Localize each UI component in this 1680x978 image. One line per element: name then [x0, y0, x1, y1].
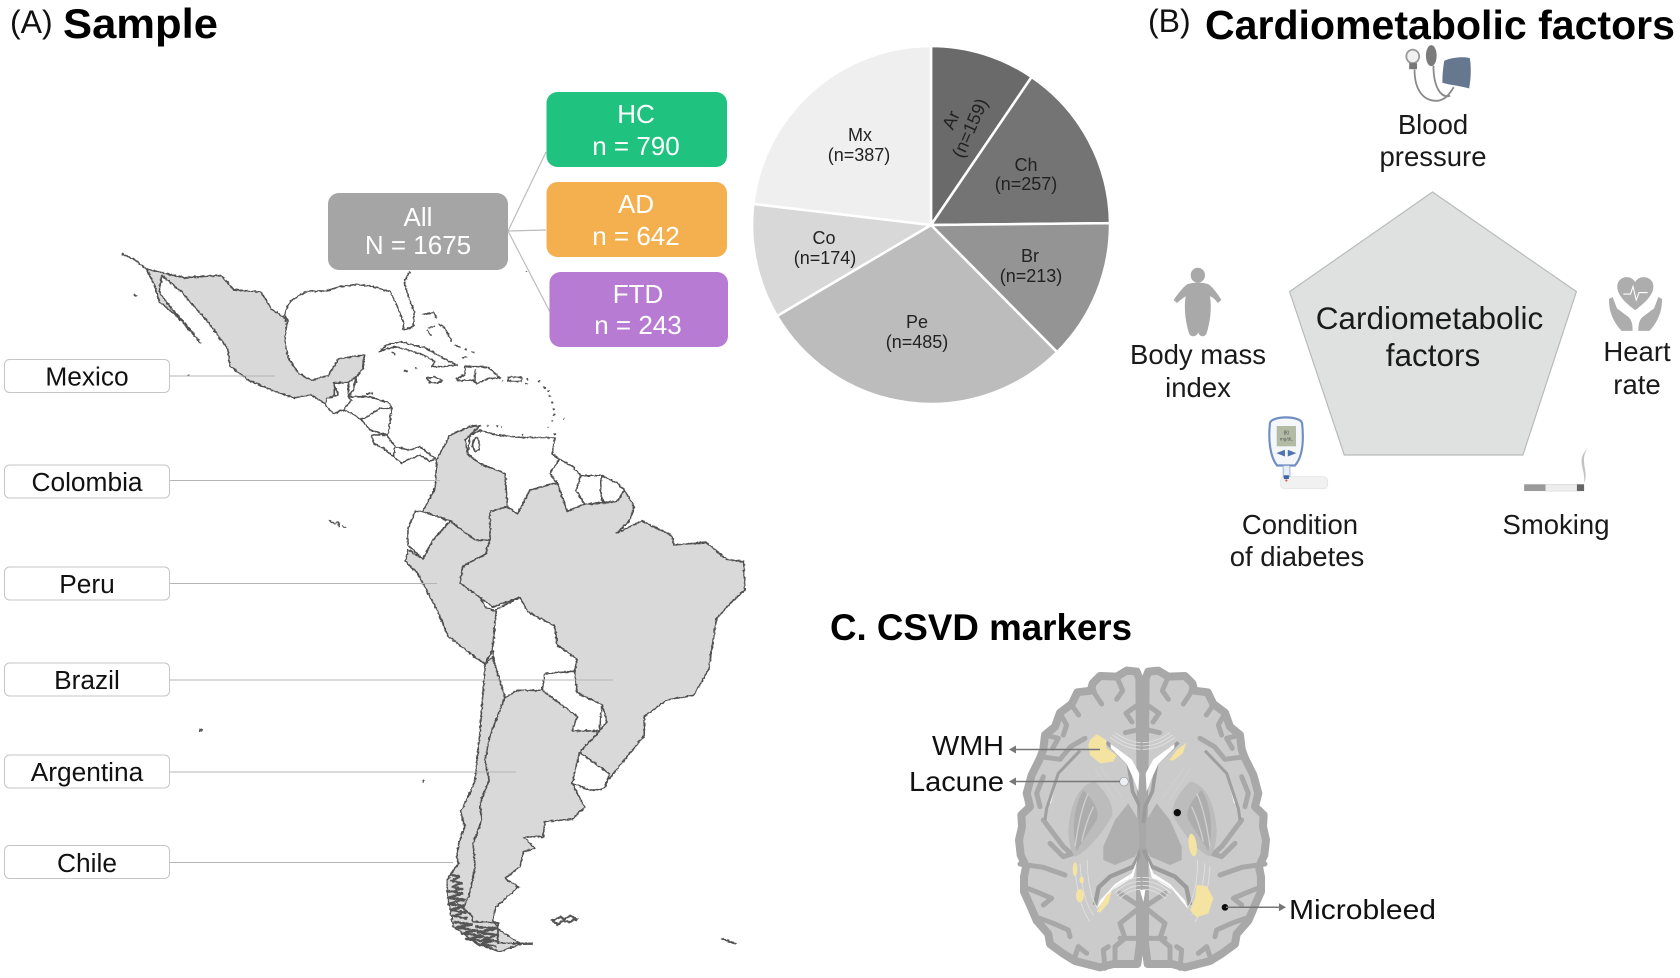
slice label: Colombia: Co: [812, 228, 836, 248]
panel label A: (A): [10, 4, 53, 40]
slice label: Brazil: Br: [1021, 246, 1039, 266]
map: Latin America: [122, 254, 745, 952]
label: Mexico: Mexico: [45, 362, 129, 392]
label: Blood pressure: pressure: [1380, 141, 1486, 172]
icon: blood pressure cuff: [1406, 45, 1471, 101]
label: Microbleed: Microbleed: [1289, 894, 1436, 925]
slice label: Peru: Pe: [906, 312, 928, 332]
WMH lesions: [1073, 734, 1213, 917]
box: FTD: [550, 272, 728, 347]
label: Body mass index: index: [1165, 372, 1231, 403]
box: AD: AD: [618, 189, 654, 219]
label: Peru: [4, 567, 170, 600]
label: Condition of diabetes: of diabetes: [1230, 541, 1364, 572]
tree connectors: [508, 152, 550, 312]
icon: glucometer: mg/dL: [1280, 437, 1293, 443]
slice label: Colombia: [794, 228, 856, 268]
label: Brazil: [4, 663, 170, 696]
panel B: Cardiometabolic factors: [1130, 2, 1675, 572]
label: Condition of diabetes: [1230, 509, 1364, 572]
panel label B: (B): [1148, 3, 1191, 39]
box: All: [328, 193, 508, 270]
panel C: CSVD markers: [830, 607, 1436, 978]
arrow: Lacune: [1009, 778, 1120, 786]
label: Colombia: [4, 465, 170, 498]
box: HC: [546, 92, 727, 167]
label: Heart rate: Heart: [1603, 336, 1671, 367]
label: Chile: [4, 846, 170, 878]
slice label: Mexico: [828, 125, 890, 165]
box: FTD: FTD: [613, 279, 663, 309]
icon: glucometer: 80: [1284, 431, 1289, 437]
box: All: N = 1675: [365, 230, 471, 260]
slice label: Brazil: [1000, 246, 1062, 286]
slice label: Argentina: (n=159): [948, 95, 992, 161]
microbleeds: [1174, 809, 1228, 911]
icon: glucometer: [1269, 417, 1328, 489]
label: Body mass index: [1130, 339, 1266, 403]
box: AD: [546, 182, 727, 257]
label: Heart rate: [1603, 336, 1671, 400]
heading: Cardiometabolic factors: Cardiometabolic factors: [1205, 2, 1675, 48]
box: HC: HC: [617, 99, 655, 129]
pentagon: factors: [1386, 337, 1480, 373]
label: Argentina: Argentina: [31, 757, 144, 787]
arrow: Microbleed: [1226, 903, 1286, 911]
label: Colombia: Colombia: [31, 467, 143, 497]
label: Brazil: Brazil: [54, 665, 120, 695]
slice label: Chile: (n=257): [995, 174, 1057, 194]
slice label: Brazil: (n=213): [1000, 266, 1062, 286]
box: FTD: n = 243: [594, 310, 682, 340]
slice label: Chile: [995, 155, 1057, 194]
slice label: Mexico: Mx: [848, 125, 872, 145]
label: Peru: Peru: [59, 569, 115, 599]
label: WMH: WMH: [932, 730, 1004, 761]
icon: cigarette: [1524, 448, 1588, 491]
box: All: All: [404, 202, 432, 232]
slice label: Peru: (n=485): [886, 332, 948, 352]
label: Body mass index: Body mass: [1130, 339, 1266, 370]
slice label: Mexico: (n=387): [828, 145, 890, 165]
label: Blood pressure: [1380, 109, 1486, 172]
label: Mexico: [4, 360, 170, 392]
box: HC: n = 790: [592, 131, 680, 161]
icon: body figure: [1174, 268, 1221, 336]
lacune: [1120, 777, 1128, 786]
pentagon: Cardiometabolic: [1316, 300, 1543, 336]
label: Smoking: Smoking: [1502, 509, 1610, 540]
Caribbean and Central America: [285, 271, 564, 463]
panel A: Sample: [4, 0, 1110, 952]
label: Heart rate: rate: [1613, 369, 1661, 400]
slice label: Argentina: Ar: [938, 108, 964, 132]
heading: CSVD markers: C. CSVD markers: [830, 607, 1132, 648]
pie chart: cohort by country: [752, 46, 1110, 404]
label: Blood pressure: Blood: [1398, 109, 1468, 140]
arrow: WMH: [1009, 746, 1100, 754]
slice label: Chile: Ch: [1014, 155, 1038, 175]
pentagon: [1290, 192, 1576, 455]
label: Argentina: [4, 755, 170, 788]
slice label: Peru: [886, 312, 948, 352]
connector lines: country labels to map: [169, 376, 613, 862]
heading: Sample: Sample: [63, 0, 218, 47]
box: AD: n = 642: [592, 221, 680, 251]
icon: heart in hands: [1609, 277, 1662, 331]
label: Condition of diabetes: Condition: [1242, 509, 1358, 540]
brain axial section: [1019, 671, 1266, 978]
slice label: Colombia: (n=174): [794, 248, 856, 268]
label: Lacune: Lacune: [909, 766, 1004, 797]
label: Chile: Chile: [57, 848, 117, 878]
